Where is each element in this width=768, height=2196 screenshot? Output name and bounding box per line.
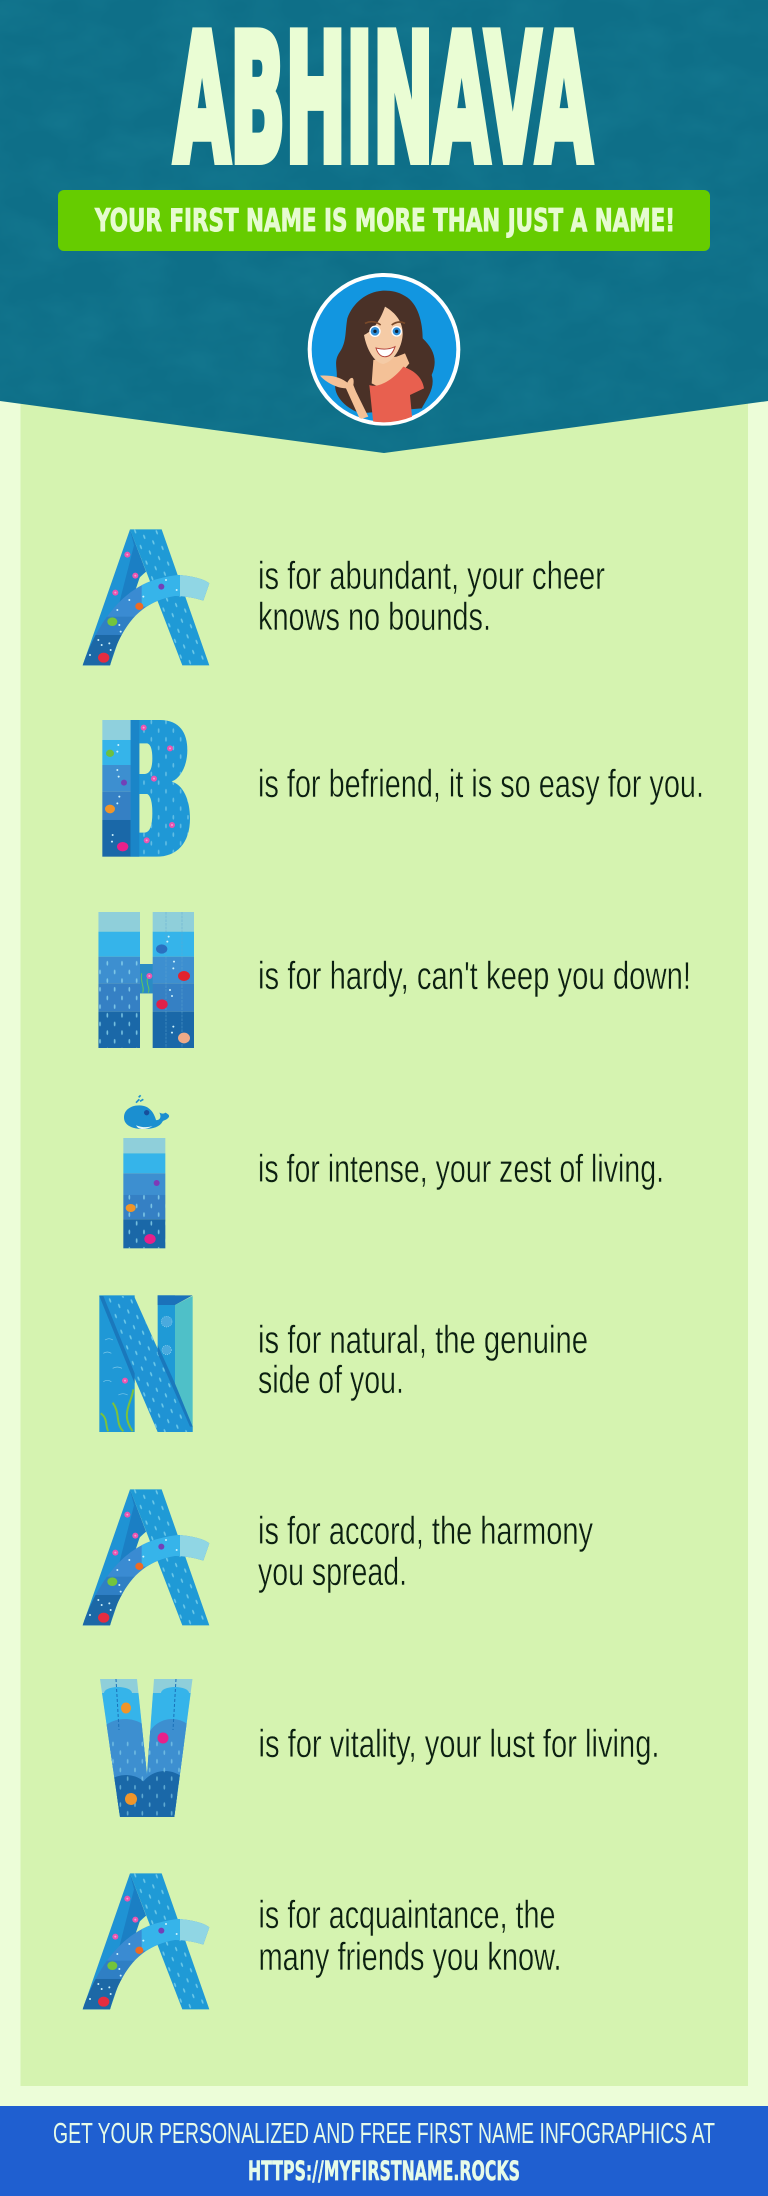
text: accord: is for accord, the harmony bbox=[258, 1510, 593, 1553]
footer: HTTPS://MYFIRSTNAME.ROCKS bbox=[248, 2156, 520, 2187]
text: abundant: is for abundant, your cheer bbox=[258, 555, 605, 598]
footer bbox=[0, 2106, 768, 2196]
letter B bbox=[102, 720, 190, 857]
letter A: accord bbox=[80, 1489, 213, 1627]
letter A: abundant bbox=[80, 529, 213, 667]
letter H bbox=[97, 910, 197, 1050]
text: accord: you spread. bbox=[258, 1551, 407, 1594]
text: abundant: knows no bounds. bbox=[258, 596, 491, 639]
letter I with whale bbox=[123, 1095, 169, 1248]
icon: avatar of woman in circle bbox=[308, 273, 460, 426]
text: acquaintance bbox=[258, 1894, 562, 1979]
letter N bbox=[99, 1295, 193, 1432]
letter V bbox=[100, 1679, 192, 1817]
banner: tagline bbox=[58, 190, 710, 251]
letter A: acquaintance bbox=[80, 1873, 213, 2011]
panel: letters background bbox=[20, 380, 748, 2086]
text: acquaintance: is for acquaintance, the bbox=[258, 1894, 556, 1937]
text: natural: side of you. bbox=[258, 1359, 404, 1402]
text: accord bbox=[258, 1510, 593, 1594]
text: acquaintance: many friends you know. bbox=[258, 1936, 562, 1979]
icon: whale bbox=[124, 1095, 169, 1129]
header band bbox=[0, 0, 768, 453]
text: natural: is for natural, the genuine bbox=[258, 1319, 588, 1362]
text: natural bbox=[258, 1319, 588, 1402]
text: abundant bbox=[258, 555, 605, 639]
